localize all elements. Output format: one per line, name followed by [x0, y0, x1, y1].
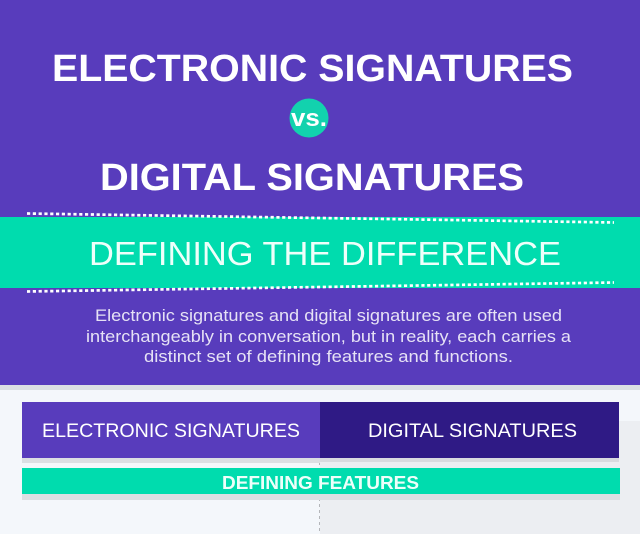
section bar: defining features [22, 468, 620, 500]
badge: vs. [290, 98, 328, 138]
column header: digital signatures [320, 402, 619, 462]
intro paragraph: Electronic signatures and digital signatures are often used [95, 307, 562, 325]
intro paragraph: distinct set of defining features and functions. [144, 348, 513, 366]
section bar: defining features: DEFINING FEATURES [222, 473, 419, 493]
banner: defining the difference: DEFINING THE DIFFERENCE [89, 235, 561, 272]
panel: purple header [0, 0, 640, 385]
column header: electronic signatures: ELECTRONIC SIGNATURES [42, 420, 300, 442]
intro paragraph [86, 307, 572, 366]
column header: digital signatures: DIGITAL SIGNATURES [368, 420, 577, 442]
panel: lower comparison background [0, 385, 640, 534]
intro paragraph: interchangeably in conversation, but in reality, each carries a [86, 328, 572, 346]
column divider [318, 462, 320, 534]
banner: defining the difference [0, 214, 640, 292]
title: electronic signatures: ELECTRONIC SIGNATURES [52, 48, 573, 90]
column header: electronic signatures [22, 402, 320, 463]
title: digital signatures: DIGITAL SIGNATURES [100, 157, 524, 199]
badge: vs.: vs. [291, 105, 327, 132]
